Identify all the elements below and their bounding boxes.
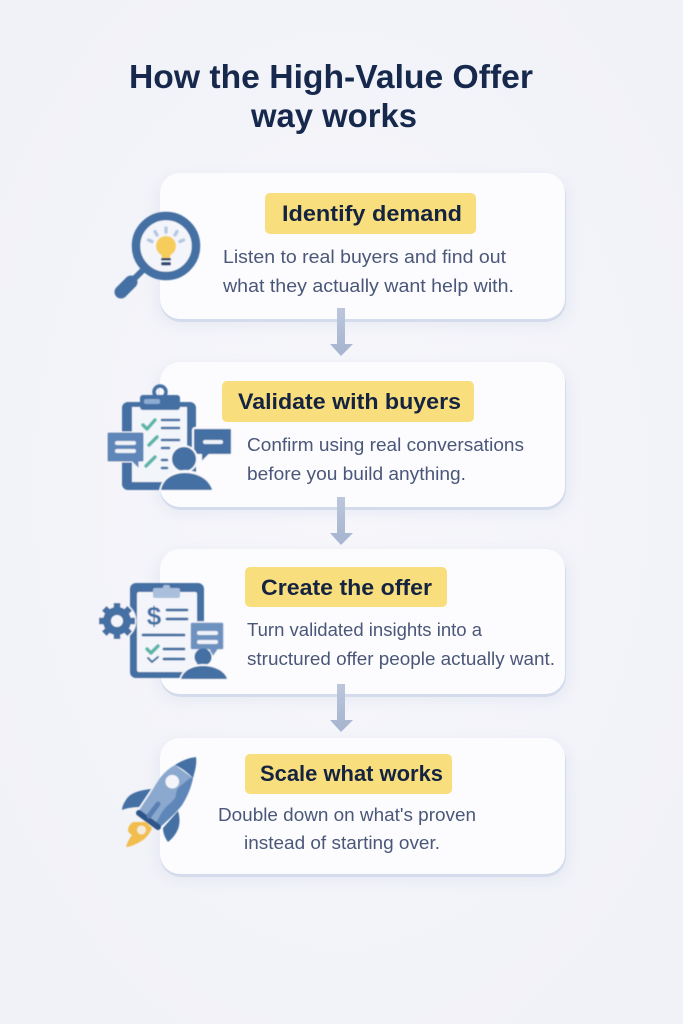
text: scale description bbox=[218, 805, 476, 853]
text: create description bbox=[247, 620, 555, 669]
text: validate description: Confirm using real conversations bbox=[247, 435, 524, 455]
arrow: step 2 to 3 bbox=[330, 497, 353, 545]
heading badge: validate with buyers bbox=[222, 381, 474, 422]
icon: clipboard with checks, chat bubbles and person bbox=[107, 386, 232, 491]
arrow: step 1 to 2 bbox=[330, 308, 353, 356]
icon: offer clipboard with gear, chat bubble and person: $ bbox=[147, 601, 162, 631]
title bbox=[129, 58, 533, 134]
title: How the High-Value Offer bbox=[129, 58, 533, 95]
text: create description: structured offer people actually want. bbox=[247, 649, 555, 669]
heading badge: scale what works: Scale what works bbox=[260, 761, 443, 786]
panel: identify demand bbox=[156, 173, 570, 326]
icon: offer clipboard with gear, chat bubble and person bbox=[98, 583, 228, 680]
text: create description: Turn validated insights into a bbox=[247, 620, 483, 640]
panel: scale what works bbox=[156, 738, 570, 881]
heading badge: scale what works bbox=[245, 754, 452, 794]
panel: create the offer bbox=[156, 549, 570, 701]
heading badge: validate with buyers: Validate with buyers bbox=[238, 389, 461, 414]
heading badge: identify demand bbox=[265, 193, 476, 234]
text: identify demand description: what they actually want help with. bbox=[222, 276, 514, 296]
text: scale description: instead of starting over. bbox=[244, 833, 440, 853]
text: validate description bbox=[247, 435, 524, 484]
text: identify demand description: Listen to real buyers and find out bbox=[223, 247, 506, 267]
icon: magnifying glass with light bulb bbox=[121, 216, 196, 292]
heading badge: create the offer bbox=[245, 567, 447, 607]
heading badge: create the offer: Create the offer bbox=[261, 575, 432, 600]
title: way works bbox=[250, 97, 417, 134]
text: identify demand description bbox=[222, 247, 514, 296]
icon: rocket bbox=[122, 757, 196, 847]
text: validate description: before you build anything. bbox=[247, 464, 466, 484]
panel: validate with buyers bbox=[156, 362, 570, 514]
heading badge: identify demand: Identify demand bbox=[282, 201, 462, 226]
text: scale description: Double down on what's proven bbox=[218, 805, 476, 825]
arrow: step 3 to 4 bbox=[330, 684, 353, 732]
